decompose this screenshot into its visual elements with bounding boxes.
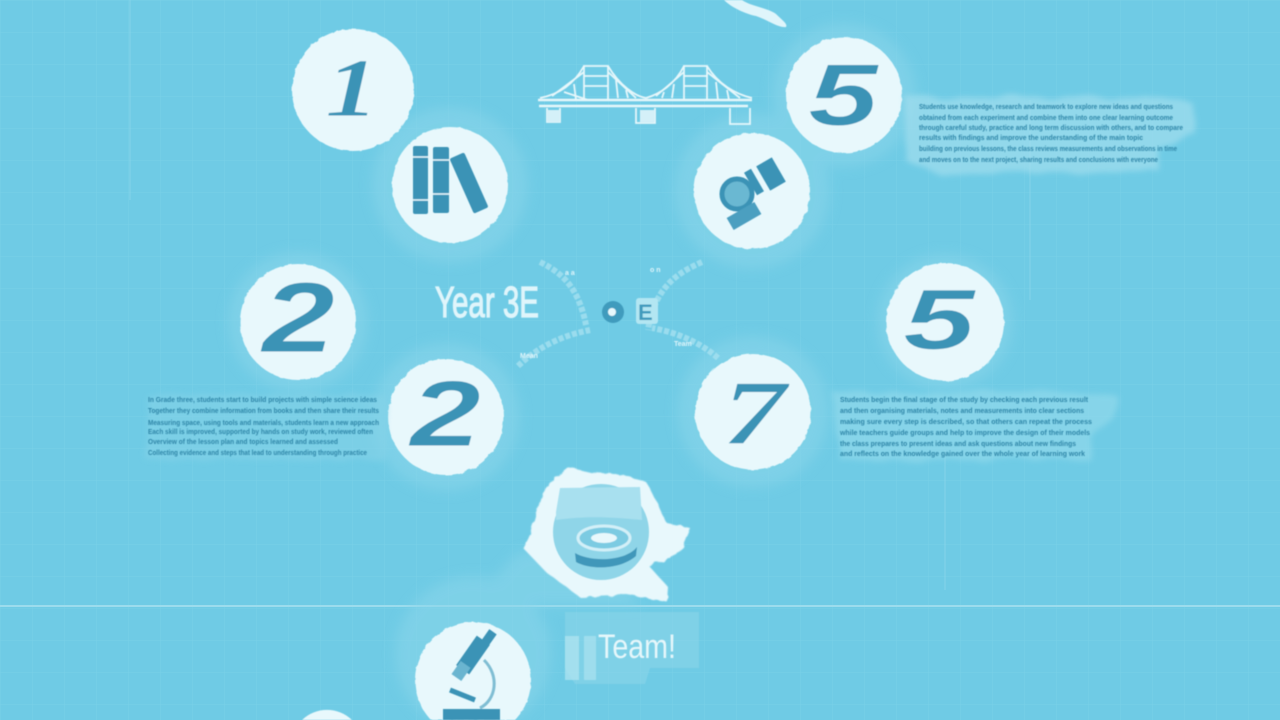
circle: number 7: 7 [722,362,792,464]
central connector diagram: E [638,300,653,325]
panel: left text block [146,394,385,460]
circle: number 2 upper [240,262,356,380]
panel: right text block: Students begin the final stage of the study by checking each previous result [840,397,1089,404]
central connector diagram: Team [674,341,692,348]
panel: right text block: while teachers guide groups and help to improve the design of their models [839,430,1090,437]
soft halos behind circles [228,23,1013,720]
panel: right text block: and reflects on the knowledge gained over the whole year of learning work [840,451,1085,458]
circle: number 2 lower: 2 [407,361,481,466]
circle: microscope icon [415,622,531,720]
panel: left text block: In Grade three, students start to build projects with simple science ideas [148,397,377,404]
circle: lens icon [694,133,810,249]
panel: top right text block: building on previous lessons, the class reviews measurements and observations in time [919,146,1177,153]
circle: number 7 [695,354,811,470]
panel: right text block: and then organising materials, notes and measurements into clear sections [840,408,1084,415]
circle: number 5 top [786,37,902,153]
circle: number 2 lower [388,359,504,475]
circle: number 5 top: 5 [808,45,879,144]
panel: left text block: Measuring space, using tools and materials, students learn a new approach [148,420,379,427]
label: bottom word [565,612,699,684]
panel: left text block: Together they combine information from books and then share their results [148,408,379,415]
central connector diagram: a a [565,270,575,277]
circle: partial bottom [302,710,352,720]
panel: right text block [832,392,1118,460]
title: year label: Year 3E [435,278,539,327]
panel: left text block: Overview of the lesson plan and topics learned and assessed [148,439,338,446]
panel: top right text block [905,97,1196,174]
central connector diagram: o n [650,267,660,274]
circle: number 5 right: 5 [903,272,977,368]
circle: number 1 [292,29,414,151]
top edge blob [724,0,786,27]
circle: number 1: 1 [325,42,379,135]
icon: large lens on torn paper [523,467,690,602]
central connector diagram [518,262,718,366]
panel: top right text block: through careful study, practice and long term discussion with others, and to compare [919,125,1183,132]
panel: top right text block: and moves on to the next project, sharing results and conclusions with everyone [919,157,1158,164]
central connector diagram: Mean [520,353,538,360]
circle: number 2 upper: 2 [259,262,335,374]
panel: right text block: the class prepares to present ideas and ask questions about new findings [840,441,1076,448]
icon: suspension bridge [538,66,752,124]
label: bottom word: Team! [598,628,676,666]
panel: top right text block: obtained from each experiment and combine them into one clear learning outcome [919,115,1173,122]
circle: number 5 right [886,263,1004,381]
panel: left text block: Each skill is improved, supported by hands on study work, reviewed often [148,429,373,436]
panel: top right text block: Students use knowledge, research and teamwork to explore new ideas and questions [919,104,1173,111]
circle: books icon [392,127,508,243]
panel: left text block: Collecting evidence and steps that lead to understanding through practice [148,450,367,457]
panel: top right text block: results with findings and improve the understanding of the main topic [919,135,1143,142]
panel: right text block: making sure every step is described, so that others can repeat the process [840,419,1092,426]
